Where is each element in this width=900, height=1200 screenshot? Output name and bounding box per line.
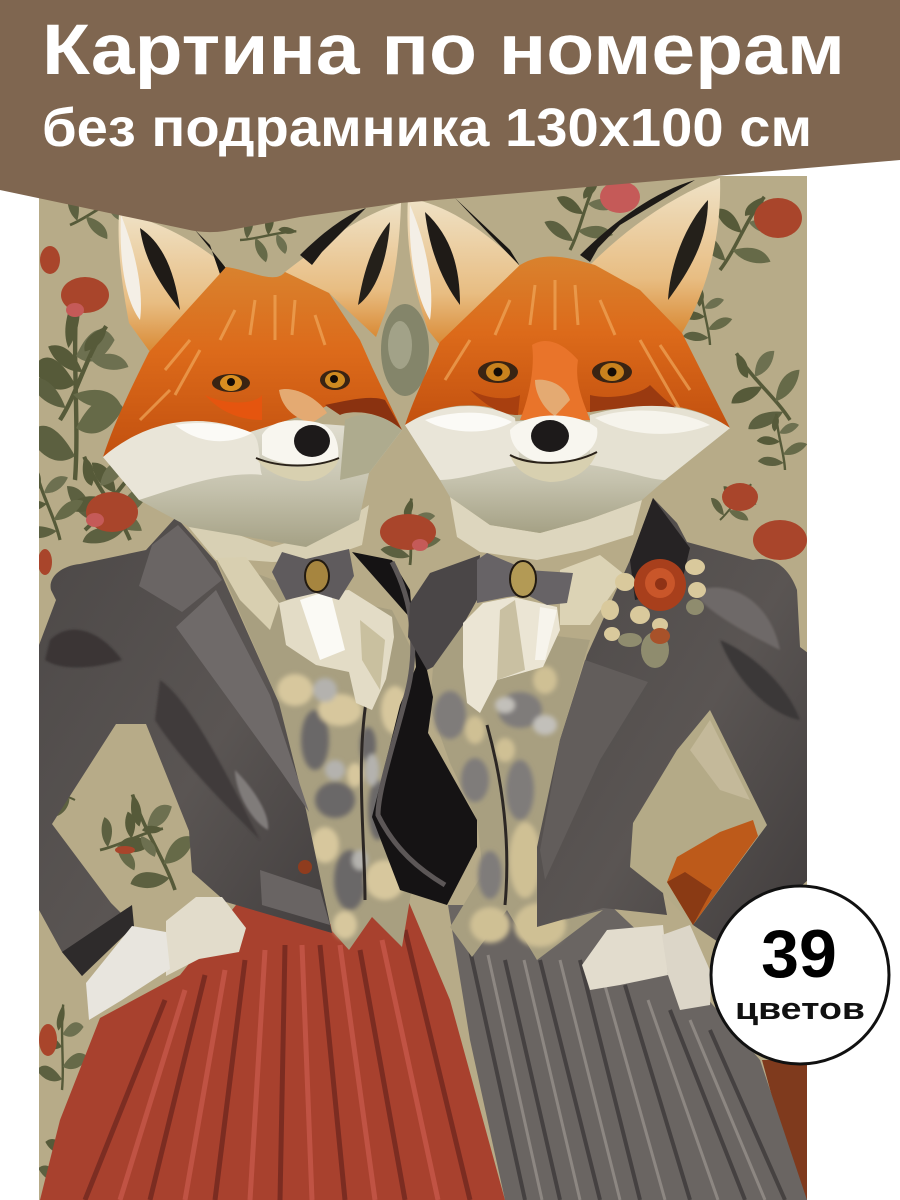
left ear xyxy=(119,212,262,352)
skirt pleats xyxy=(85,930,470,1200)
collar shadow xyxy=(630,498,690,600)
right fox collar ruffles xyxy=(450,497,642,560)
left fox collar ruffles xyxy=(172,505,369,562)
head fur xyxy=(405,256,730,428)
fur streaks xyxy=(445,280,690,410)
left fox vest xyxy=(216,558,412,950)
blaze xyxy=(279,389,327,423)
badge number: 39 xyxy=(761,916,837,992)
right fox jacket xyxy=(408,498,808,950)
neck xyxy=(103,420,402,547)
blaze xyxy=(520,341,590,420)
head fur xyxy=(103,267,402,457)
wallpaper florals xyxy=(2,166,820,1195)
red skirt of left fox xyxy=(40,893,505,1200)
lower lapel xyxy=(176,590,309,812)
left side panel xyxy=(408,555,480,670)
fur streaks xyxy=(140,295,325,420)
jacket button xyxy=(298,860,312,874)
right fox vest xyxy=(430,625,603,960)
nose xyxy=(531,420,569,452)
main body xyxy=(537,498,808,950)
title: Картина по номерам xyxy=(42,11,845,90)
right ear xyxy=(285,203,401,337)
skirt pleats xyxy=(470,950,785,1200)
lower lapel xyxy=(540,660,648,880)
grey skirt of right fox xyxy=(448,905,807,1200)
badge: number of colours xyxy=(711,886,889,1064)
dark inner lining between the jackets xyxy=(352,552,477,905)
upper lapel xyxy=(139,525,222,612)
muzzle xyxy=(262,420,338,465)
badge label: цветов xyxy=(735,991,865,1026)
right fox hand and cuff xyxy=(582,925,712,1010)
header banner xyxy=(0,0,900,232)
muzzle xyxy=(510,415,597,464)
orange fur at right edge xyxy=(762,1060,807,1200)
neck xyxy=(405,420,730,533)
right fox head xyxy=(405,178,730,533)
tail of right fox xyxy=(667,720,758,925)
painting: two foxes in costume xyxy=(2,166,820,1200)
dark eye shading xyxy=(470,390,520,415)
left ear xyxy=(407,198,555,345)
white cheeks xyxy=(405,406,520,480)
vest pattern xyxy=(277,674,409,939)
eyes xyxy=(212,374,250,392)
brooch xyxy=(510,561,536,597)
nose xyxy=(294,425,330,457)
left fox head xyxy=(103,203,402,547)
vest pattern xyxy=(434,666,566,947)
dark eye shading xyxy=(325,398,402,430)
white cheek xyxy=(103,421,262,500)
sleeve cuff xyxy=(62,905,134,976)
lower jaw xyxy=(510,452,597,482)
right olive cheek xyxy=(340,415,402,480)
eyes xyxy=(478,361,518,383)
jacket highlights xyxy=(155,680,260,840)
subtitle: без подрамника 130х100 см xyxy=(42,98,812,158)
brooch xyxy=(305,560,329,592)
bow tie xyxy=(477,553,573,605)
left fox jacket xyxy=(39,517,332,976)
right ear xyxy=(590,178,720,333)
boutonniere rose xyxy=(601,559,706,668)
left fox hand and cuff xyxy=(86,897,246,1020)
lining edge xyxy=(378,562,445,885)
left fox cravat xyxy=(216,549,394,710)
bow tie xyxy=(272,549,354,600)
right fox cravat xyxy=(463,553,625,713)
lower jaw xyxy=(256,458,339,481)
sleeve highlights xyxy=(700,588,780,650)
wallpaper background xyxy=(39,176,807,1200)
lace bib xyxy=(560,555,625,625)
